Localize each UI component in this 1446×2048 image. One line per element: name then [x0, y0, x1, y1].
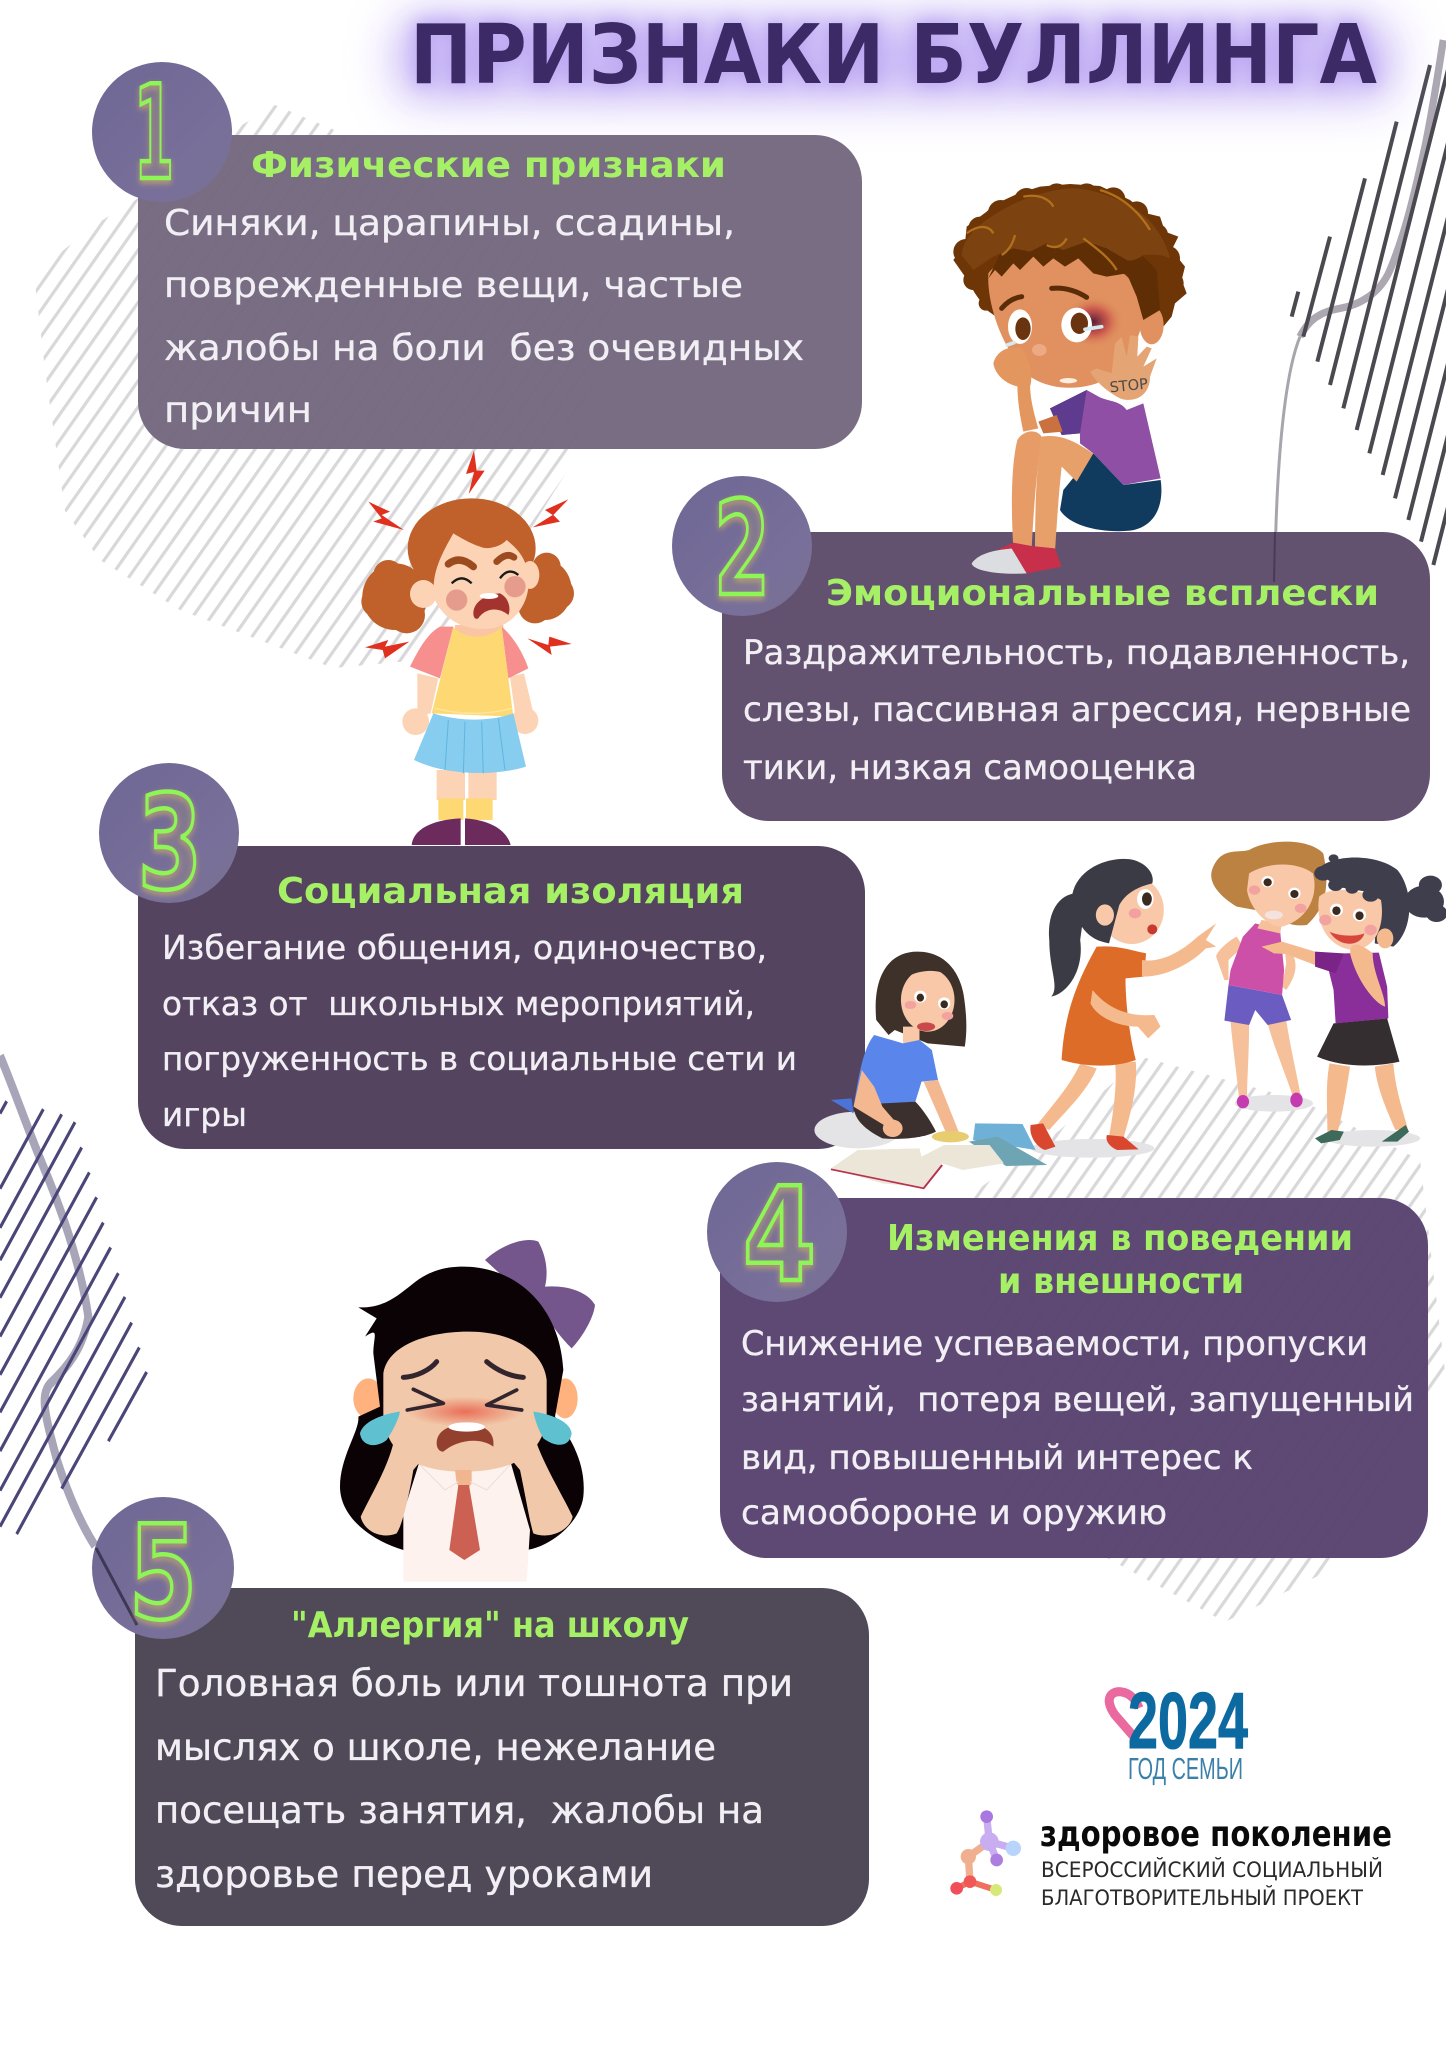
- text: social isolation body: [162, 928, 797, 1134]
- text: school allergy body: посещать занятия, жалобы на: [155, 1789, 764, 1832]
- text: emotional outbursts body: тики, низкая самооценка: [743, 748, 1197, 788]
- text: social isolation body: погруженность в социальные сети и: [162, 1039, 797, 1078]
- girl in pink top: [1211, 842, 1326, 1108]
- text: behaviour changes body: [741, 1324, 1414, 1533]
- logo: year of family 2024: 2024: [1128, 1676, 1248, 1765]
- text: behaviour changes body: вид, повышенный интерес к: [741, 1438, 1253, 1478]
- shadows: [814, 1095, 1420, 1158]
- badge: number 5: [92, 1497, 234, 1649]
- background: gray stripes upper left: [36, 105, 568, 668]
- text: school allergy body: [155, 1662, 793, 1896]
- text: physical signs body: причин: [164, 390, 312, 431]
- text: physical signs body: Синяки, царапины, ссадины,: [164, 203, 735, 244]
- girl in orange pointing: [1030, 859, 1216, 1150]
- text: school allergy body: Головная боль или тошнота при: [155, 1662, 793, 1705]
- illustration: crying girl: [340, 1240, 595, 1582]
- heading: physical signs: Физические признаки: [251, 145, 726, 186]
- background: dark stripes right: [1275, 40, 1446, 567]
- text: social isolation body: Избегание общения, одиночество,: [162, 928, 767, 967]
- text: behaviour changes body: занятий, потеря вещей, запущенный: [741, 1380, 1414, 1420]
- text: physical signs body: поврежденные вещи, частые: [164, 265, 743, 306]
- badge: number 3: [99, 763, 239, 919]
- title: ПРИЗНАКИ БУЛЛИНГА: [410, 8, 1377, 103]
- logo: healthy generation wordmark: БЛАГОТВОРИТЕЛЬНЫЙ ПРОЕКТ: [1041, 1885, 1363, 1910]
- illustration: sad boy with black eye: [953, 183, 1187, 574]
- text: emotional outbursts body: [743, 633, 1411, 788]
- text: school allergy body: здоровье перед уроками: [155, 1853, 653, 1896]
- heading: social isolation: Социальная изоляция: [277, 871, 744, 912]
- curve line crossing panel: [1274, 532, 1275, 582]
- logo: year of family 2024: ГОД СЕМЬИ: [1128, 1751, 1243, 1786]
- illustration: angry girl: [361, 451, 574, 845]
- logo: year of family 2024: [1109, 1676, 1248, 1786]
- heading: behaviour changes: Изменения в поведении: [887, 1218, 1353, 1259]
- text: school allergy body: мыслях о школе, нежелание: [155, 1726, 716, 1769]
- heading: behaviour changes: [887, 1218, 1353, 1302]
- panel: social isolation: [99, 763, 865, 1149]
- heading: school allergy: "Аллергия" на школу: [291, 1605, 689, 1646]
- badge: number 2: [672, 473, 812, 625]
- illustration: group of girls bullying: [814, 842, 1446, 1188]
- logo: healthy generation wordmark: ВСЕРОССИЙСКИЙ СОЦИАЛЬНЫЙ: [1041, 1857, 1383, 1882]
- heading: emotional outbursts: Эмоциональные всплески: [826, 573, 1379, 614]
- panel: school allergy: [92, 1497, 869, 1926]
- text: behaviour changes body: Снижение успеваемости, пропуски: [741, 1324, 1368, 1364]
- badge: number 1: [92, 57, 232, 209]
- logo: healthy generation molecule icon: [950, 1810, 1021, 1896]
- panel: behaviour changes: [707, 1159, 1428, 1558]
- text: emotional outbursts body: слезы, пассивная агрессия, нервные: [743, 690, 1411, 730]
- badge: number 3: 3: [138, 767, 202, 919]
- text: emotional outbursts body: Раздражительность, подавленность,: [743, 633, 1410, 673]
- illustration: sad boy with black eye: STOP: [1109, 375, 1149, 396]
- badge: number 4: [707, 1159, 847, 1311]
- text: physical signs body: жалобы на боли без очевидных: [164, 328, 804, 369]
- heading: behaviour changes: и внешности: [998, 1261, 1244, 1302]
- logo: healthy generation wordmark: [1040, 1814, 1392, 1910]
- badge: number 2: 2: [714, 473, 770, 625]
- text: social isolation body: игры: [162, 1095, 247, 1134]
- background: gray stripes behind group scene: [974, 1058, 1444, 1621]
- girl sitting with books: [831, 952, 1047, 1188]
- text: social isolation body: отказ от школьных мероприятий,: [162, 984, 755, 1023]
- girl in purple laughing: [1261, 854, 1446, 1143]
- badge: number 5: 5: [129, 1497, 197, 1649]
- panel: emotional outbursts: [672, 473, 1430, 821]
- background: purple stripes left: [0, 1056, 147, 1546]
- text: behaviour changes body: самообороне и оружию: [741, 1493, 1167, 1533]
- badge: number 4: 4: [743, 1159, 816, 1311]
- text: physical signs body: [164, 203, 804, 431]
- badge: number 1: 1: [134, 57, 174, 209]
- panel: physical signs: [92, 57, 862, 449]
